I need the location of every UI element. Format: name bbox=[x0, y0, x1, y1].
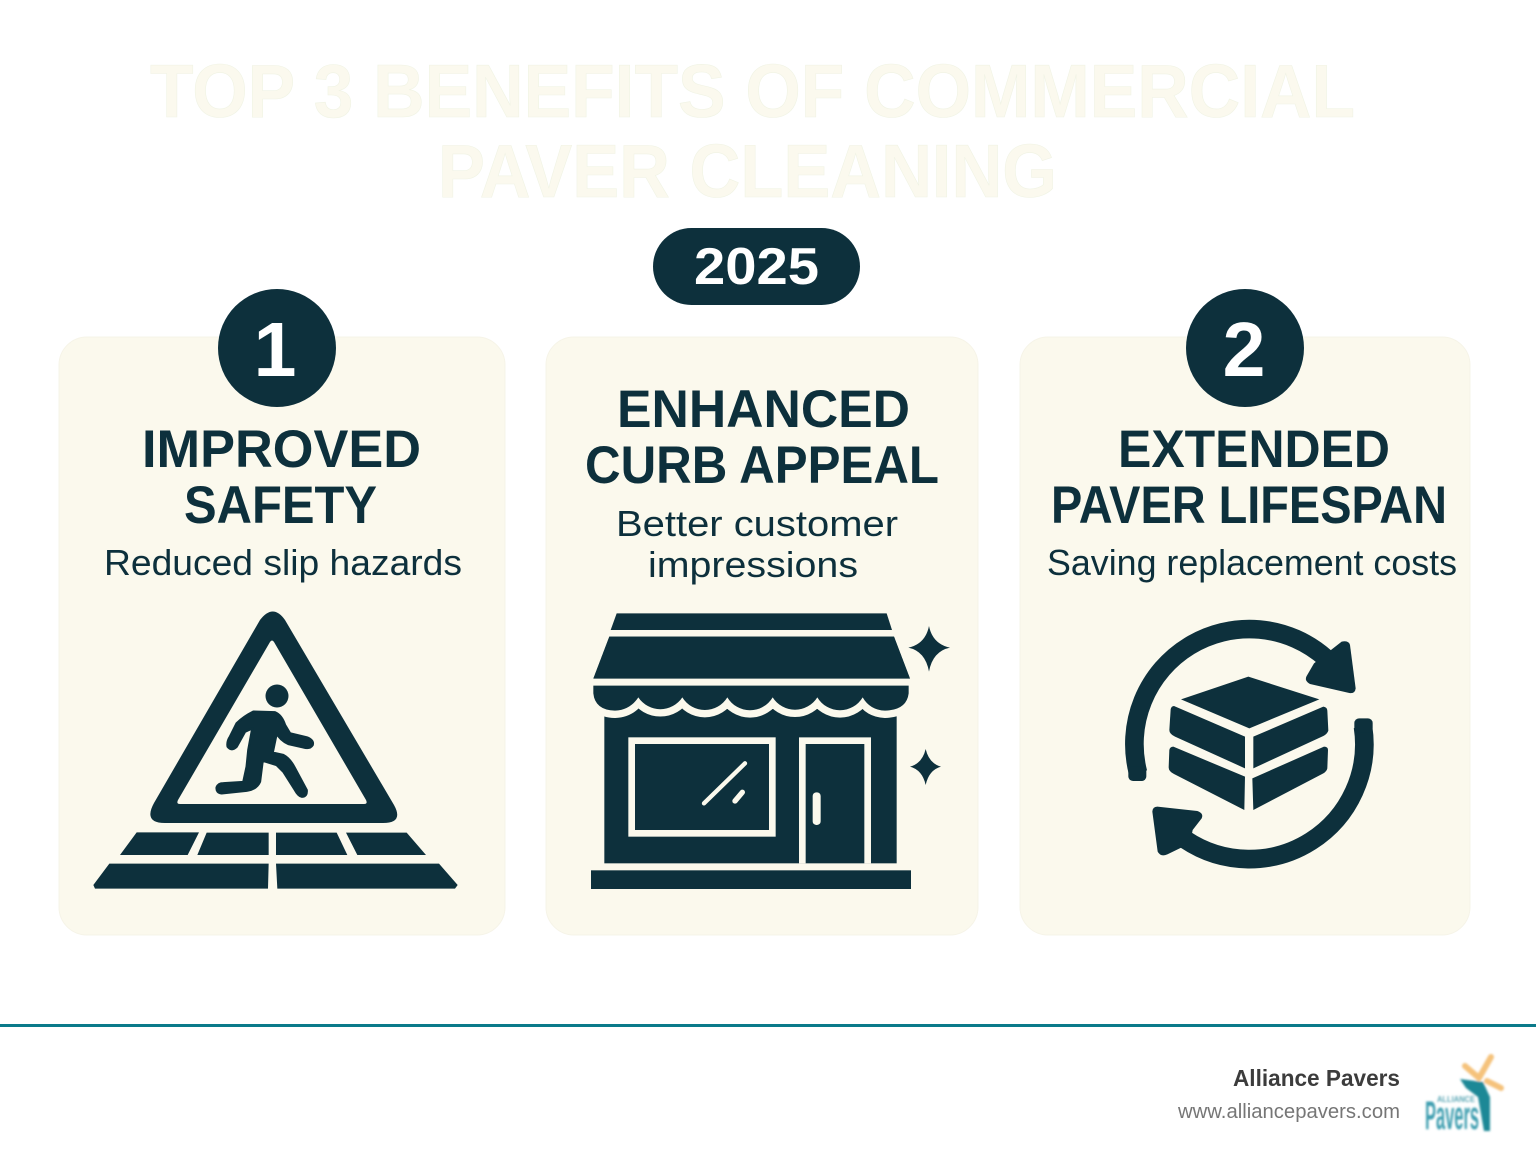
heading: improved safety: SAFETY bbox=[184, 476, 377, 535]
title bbox=[150, 49, 1355, 213]
heading: improved safety bbox=[142, 420, 421, 535]
number badge: 1: 1 bbox=[254, 307, 296, 393]
number badge: 2: 2 bbox=[1223, 307, 1265, 393]
text: reduced slip hazards: Reduced slip hazards bbox=[104, 542, 462, 583]
heading: improved safety: IMPROVED bbox=[142, 420, 421, 479]
footer: company name: Alliance Pavers bbox=[1233, 1065, 1400, 1091]
heading: enhanced curb appeal bbox=[585, 380, 939, 495]
panel: improved safety bbox=[59, 337, 505, 935]
panel: enhanced curb appeal bbox=[546, 337, 978, 935]
panel: extended paver lifespan bbox=[1020, 337, 1470, 935]
text: better customer impressions: impressions bbox=[648, 544, 858, 585]
number badge: 2 bbox=[1186, 289, 1304, 407]
icon: storefront with sparkles bbox=[591, 613, 950, 889]
heading: extended paver lifespan: EXTENDED bbox=[1118, 420, 1390, 479]
logo: Alliance Pavers: ALLIANCE bbox=[1437, 1095, 1476, 1104]
icon: paver block with renewal arrows bbox=[1128, 629, 1373, 859]
icon: warning triangle with slipping person on pavers bbox=[93, 612, 458, 889]
logo: Alliance Pavers bbox=[1425, 1057, 1501, 1138]
footer: website: www.alliancepavers.com bbox=[1177, 1101, 1400, 1123]
heading: enhanced curb appeal: ENHANCED bbox=[617, 380, 910, 439]
footer rule bbox=[0, 1024, 1536, 1027]
title: TOP 3 BENEFITS OF COMMERCIAL bbox=[150, 49, 1355, 133]
badge: 2025 bbox=[653, 228, 860, 305]
heading: extended paver lifespan: PAVER LIFESPAN bbox=[1051, 476, 1447, 535]
heading: extended paver lifespan bbox=[1051, 420, 1447, 535]
heading: enhanced curb appeal: CURB APPEAL bbox=[585, 436, 939, 495]
text: better customer impressions bbox=[616, 503, 898, 585]
text: saving replacement costs: Saving replacement costs bbox=[1047, 542, 1457, 583]
number badge: 1 bbox=[218, 289, 336, 407]
text: better customer impressions: Better customer bbox=[616, 503, 898, 544]
badge: 2025: 2025 bbox=[694, 238, 819, 296]
title: PAVER CLEANING bbox=[438, 129, 1057, 213]
